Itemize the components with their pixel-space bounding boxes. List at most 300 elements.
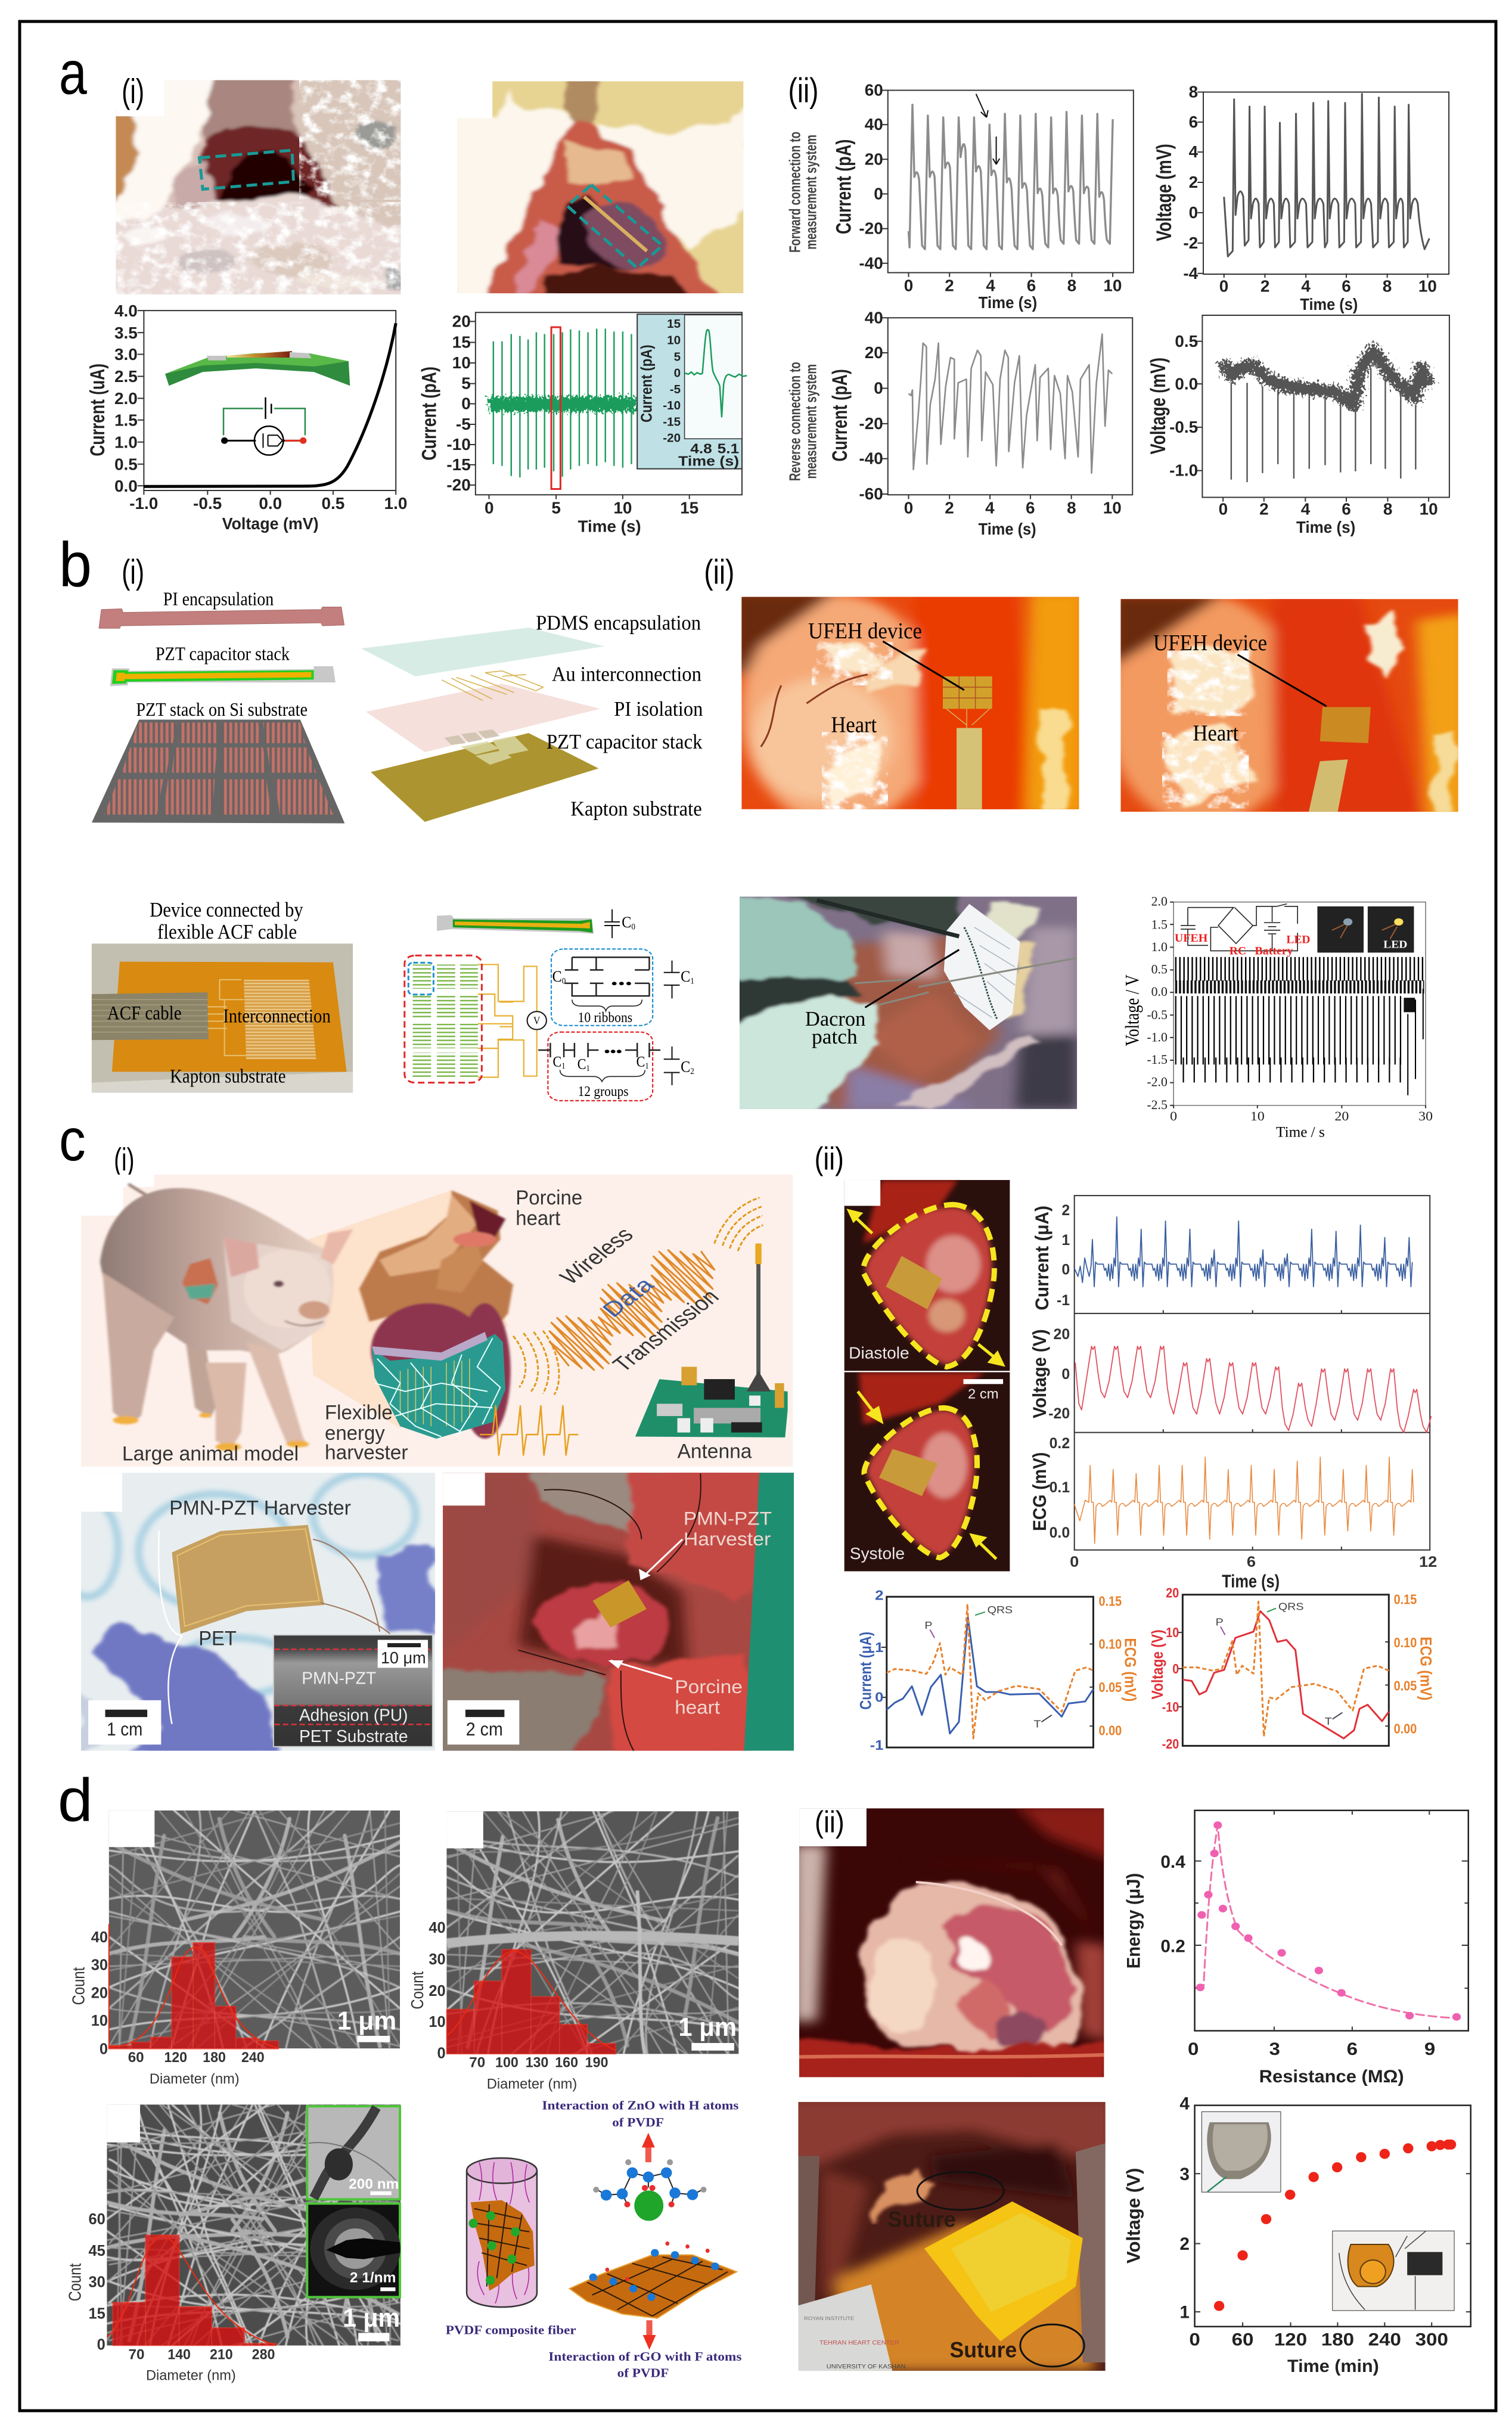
circuit schematic of device: C xyxy=(552,1053,566,1070)
panel c left xyxy=(57,1107,794,1757)
inset: zoomed pulse: 0 xyxy=(674,367,681,380)
wave labels xyxy=(122,1187,752,1465)
photo: harvester on porcine heart: PMN-PZT xyxy=(684,1508,772,1529)
chart: voltage vs ECG single beat: ECG (mV) xyxy=(1417,1637,1435,1700)
SEM image 3 with histogram and insets xyxy=(66,2101,400,2383)
photo: implanted yellow patch with sutures: UNIVERSITY OF KASHAN xyxy=(827,2364,906,2370)
chart: current, voltage, ECG time series: 0.2 xyxy=(1050,1436,1070,1452)
chart: voltage vs time with insets: 60 xyxy=(1232,2330,1253,2349)
wave labels: harvester xyxy=(325,1441,408,1464)
label (i): (i) xyxy=(122,72,144,110)
row label forward connection: measurement system xyxy=(802,135,819,250)
inset: layer cross section: 10 μm xyxy=(381,1648,426,1667)
photo: Dacron patch surgery xyxy=(731,889,1077,1115)
SEM image 2 with histogram: Count xyxy=(408,1971,427,2009)
row label forward connection: Forward connection to xyxy=(786,132,803,253)
SEM image 2 with histogram: 10 xyxy=(429,2014,446,2030)
chart: current vs ECG single beat: 0.10 xyxy=(1099,1637,1122,1652)
photo: heart in open chest xyxy=(794,1804,1113,2082)
chart: LED charging voltage: 10 xyxy=(1250,1109,1265,1123)
chart: current, voltage, ECG time series xyxy=(1029,1196,1437,1591)
device photo with ACF cable: Device connected by xyxy=(150,898,303,921)
inset: zoomed pulse: Current (pA) xyxy=(638,344,655,423)
chart: reverse current: -20 xyxy=(859,414,883,433)
photo: harvester on porcine heart: 2 cm xyxy=(466,1719,503,1740)
photo: implanted yellow patch with sutures xyxy=(789,2097,1113,2371)
chart: I-V curve with device inset: 4.0 xyxy=(114,302,138,320)
chart: LED charging voltage: -2.5 xyxy=(1147,1098,1168,1112)
chart: reverse voltage: 2 xyxy=(1259,500,1269,518)
chart: forward voltage: Time (s) xyxy=(1300,294,1358,313)
label (i): (i) xyxy=(122,552,144,591)
SEM image 2 with histogram: 30 xyxy=(429,1951,446,1968)
scale bar 1 cm: 1 cm xyxy=(107,1719,142,1740)
SEM image 2 with histogram: Diameter (nm) xyxy=(487,2076,577,2092)
chart: voltage vs time with insets: Voltage (V) xyxy=(1123,2168,1144,2263)
device photo with ACF cable xyxy=(92,898,353,1093)
photo: harvester on porcine heart: Harvester xyxy=(684,1529,771,1550)
chart: voltage vs ECG single beat: Voltage (V) xyxy=(1148,1629,1166,1699)
photo: rat chest with device (bubble wrap) xyxy=(116,80,400,294)
chart: forward current: 8 xyxy=(1067,276,1076,294)
circuit schematic of device: 1 xyxy=(561,1061,566,1070)
heading letter d: d xyxy=(58,1766,93,1834)
chart: current, voltage, ECG time series: 0 xyxy=(1070,1553,1079,1570)
inset: layer cross section xyxy=(274,1635,433,1747)
heart beat trace xyxy=(480,1406,578,1455)
chart: voltage vs ECG single beat: 0.00 xyxy=(1394,1722,1417,1737)
inset: rectifier circuit and LED photos: RC xyxy=(1230,945,1246,957)
PI encapsulation bar xyxy=(99,589,344,628)
PVDF composite fiber diagram: of PVDF xyxy=(612,2116,664,2129)
chart: reverse current: 2 xyxy=(945,499,954,517)
chart: current, voltage, ECG time series: Voltage (V) xyxy=(1029,1329,1050,1418)
SEM image 1 with histogram: 180 xyxy=(203,2049,226,2065)
label (ii): (ii) xyxy=(788,72,818,110)
chart: LED charging voltage: 2.0 xyxy=(1151,895,1168,909)
photo: systole: 2 cm xyxy=(968,1386,999,1402)
chart: reverse current xyxy=(828,308,1132,538)
red arrow down xyxy=(643,2320,656,2350)
chart: forward voltage: 6 xyxy=(1189,113,1198,131)
photo: implanted yellow patch with sutures: Suture xyxy=(950,2338,1017,2362)
row label reverse connection xyxy=(786,362,819,481)
chart: voltage vs time with insets: 0 xyxy=(1189,2330,1200,2349)
chart: forward voltage: 8 xyxy=(1189,83,1198,101)
chart: green current trace with inset: 20 xyxy=(452,312,471,330)
SEM image 3 with histogram and insets: 1 μm xyxy=(343,2303,400,2333)
icon: transistor circuit xyxy=(221,398,306,455)
PZT stack on Si substrate: PZT stack on Si substrate xyxy=(136,700,308,721)
chart: energy vs resistance: 6 xyxy=(1347,2039,1358,2058)
photo: UFEH device bent with heart: Heart xyxy=(1193,721,1238,746)
chart: voltage vs time with insets: 120 xyxy=(1274,2330,1307,2349)
panel a left column xyxy=(59,38,753,536)
inset: zoomed pulse: -10 xyxy=(663,399,681,412)
chart: energy vs resistance xyxy=(1123,1811,1468,2086)
exploded layer stack: Au interconnection xyxy=(552,662,701,685)
PVDF composite fiber diagram: Interaction of ZnO with H atoms xyxy=(542,2099,738,2113)
orange data wave xyxy=(535,1235,734,1381)
chart: forward current: 6 xyxy=(1027,276,1036,294)
SEM image 1 with histogram xyxy=(69,1811,400,2086)
chart: I-V curve with device inset: -0.5 xyxy=(193,494,222,513)
chart: green current trace with inset: Time (s) xyxy=(578,517,641,536)
SEM image 3 with histogram and insets: 45 xyxy=(89,2243,105,2259)
panel d left xyxy=(58,1766,741,2383)
wave labels: Flexible xyxy=(325,1402,393,1424)
chart: voltage vs time with insets: 300 xyxy=(1415,2330,1448,2349)
inset: layer cross section: Adhesion (PU) xyxy=(299,1705,408,1725)
circuit schematic of device: C xyxy=(578,1056,591,1072)
wave labels: Wireless xyxy=(555,1224,638,1289)
SEM image 2 with histogram: 1 μm xyxy=(678,2013,737,2042)
SEM image 3 with histogram and insets: Count xyxy=(66,2263,85,2301)
photo: UFEH device bent with heart: UFEH device xyxy=(1153,631,1267,655)
SEM image 3 with histogram and insets: 30 xyxy=(89,2274,105,2290)
SEM image 1 with histogram: 10 xyxy=(91,2013,108,2029)
chart: forward current: 60 xyxy=(865,81,883,100)
SEM image 1 with histogram: 0 xyxy=(100,2041,108,2057)
inset: battery pack xyxy=(1201,2112,1281,2192)
chart: forward voltage: -4 xyxy=(1183,264,1199,282)
exploded layer stack: PI isolation xyxy=(614,697,703,721)
chart: I-V curve with device inset: 0.0 xyxy=(114,477,138,495)
panel b right xyxy=(704,552,1467,1123)
cylinder xyxy=(467,2158,537,2307)
inset: diffraction pattern xyxy=(307,2203,400,2297)
panel b left xyxy=(59,529,703,1101)
chart: LED charging voltage: -0.5 xyxy=(1147,1008,1168,1022)
inset: zoomed pulse: Time (s) xyxy=(678,454,739,469)
chart: forward current: Current (pA) xyxy=(832,139,855,234)
photo: harvester on porcine heart: heart xyxy=(675,1697,720,1718)
photo: UFEH device on heart: Heart xyxy=(831,712,877,737)
SEM image 1 with histogram: 30 xyxy=(91,1957,108,1974)
SEM image 3 with histogram and insets: Diameter (nm) xyxy=(146,2367,236,2383)
chart: current vs ECG single beat: ECG (mV) xyxy=(1121,1638,1140,1701)
device photo with ACF cable: Interconnection xyxy=(223,1005,331,1027)
red arrow up xyxy=(642,2133,655,2162)
chart: forward voltage: Voltage (mV) xyxy=(1152,144,1176,241)
device photo with ACF cable: Kapton substrate xyxy=(170,1066,286,1087)
chart: forward current: -40 xyxy=(859,254,883,272)
chart: reverse current: 0 xyxy=(874,379,883,398)
row label reverse connection: Reverse connection to xyxy=(786,362,803,481)
chart: green current trace with inset: Current (pA) xyxy=(418,367,440,461)
chart: current, voltage, ECG time series: 20 xyxy=(1054,1327,1070,1343)
chart: I-V curve with device inset: 1.0 xyxy=(114,433,138,451)
inset: rectifier circuit and LED photos: LED xyxy=(1383,938,1407,951)
chart: forward voltage: 0 xyxy=(1219,277,1228,296)
chart: current, voltage, ECG time series: -20 xyxy=(1048,1406,1070,1422)
illustration: antenna and circuit board xyxy=(635,1244,788,1437)
chart: forward voltage: 8 xyxy=(1383,277,1392,296)
chart: reverse current: 40 xyxy=(865,308,883,327)
panel c right xyxy=(815,1124,1437,1753)
circuit schematic of device: 1 xyxy=(586,1063,590,1073)
circuit schematic of device: C xyxy=(681,967,695,985)
chart: I-V curve with device inset: 3.0 xyxy=(114,345,138,364)
SEM image 1 with histogram: 240 xyxy=(241,2049,265,2065)
chart: LED charging voltage: 30 xyxy=(1418,1109,1433,1123)
circuit schematic of device: C xyxy=(637,1053,650,1070)
chart: reverse current: Time (s) xyxy=(979,519,1036,538)
chart: forward current: 0 xyxy=(904,276,913,294)
SEM image 2 with histogram: 100 xyxy=(495,2054,519,2070)
chart: voltage vs ECG single beat: 20 xyxy=(1166,1585,1179,1601)
chart: voltage vs time with insets: 2 xyxy=(1179,2234,1190,2254)
photo: UFEH device on heart xyxy=(741,597,1079,809)
inset: rectifier circuit and LED photos xyxy=(1175,904,1414,957)
chart: forward current: 0 xyxy=(874,185,883,203)
chart: energy vs resistance: Energy (μJ) xyxy=(1123,1873,1144,1968)
SEM image 2 with histogram: 190 xyxy=(585,2054,608,2070)
chart: LED charging voltage: 0.5 xyxy=(1151,962,1168,977)
chart: forward voltage: 10 xyxy=(1418,277,1437,296)
chart: LED charging voltage: -2.0 xyxy=(1147,1075,1168,1089)
photo: UFEH device bent with heart xyxy=(1120,599,1458,812)
chart: forward voltage: 2 xyxy=(1260,277,1269,296)
chart: LED charging voltage: 0 xyxy=(1170,1109,1177,1123)
chart: reverse voltage: 0.5 xyxy=(1175,332,1198,350)
chart: current vs ECG single beat: 2 xyxy=(875,1588,883,1603)
label (ii): (ii) xyxy=(815,1805,845,1839)
device photo with ACF cable: ACF cable xyxy=(107,1003,182,1024)
SEM image 2 with histogram: 70 xyxy=(469,2054,485,2070)
inset: rectifier circuit and LED photos: Battery xyxy=(1255,945,1293,957)
chart: LED charging voltage: Voltage / V xyxy=(1122,974,1143,1046)
circuit schematic of device: ... xyxy=(604,1035,623,1058)
chart: I-V curve with device inset: 2.5 xyxy=(114,367,138,386)
chart: voltage vs time with insets: 4 xyxy=(1179,2094,1190,2114)
inset: zoomed pulse: 10 xyxy=(667,334,681,347)
photo: systole xyxy=(845,1372,1010,1572)
chart: reverse voltage: 10 xyxy=(1420,500,1438,518)
SEM image 1 with histogram: Count xyxy=(69,1967,88,2005)
SEM image 1 with histogram: 20 xyxy=(91,1985,108,2001)
chart: forward current: 10 xyxy=(1103,276,1122,294)
inset: zoomed pulse xyxy=(637,314,747,469)
PZT stack on Si substrate xyxy=(92,700,344,823)
photo: Dacron patch surgery: patch xyxy=(812,1026,858,1048)
chart: current vs ECG single beat xyxy=(856,1588,1140,1753)
chart: forward current: Time (s) xyxy=(979,293,1037,312)
photo: implanted yellow patch with sutures: Suture xyxy=(887,2207,956,2232)
chart: reverse voltage: -0.5 xyxy=(1169,418,1198,436)
chart: current, voltage, ECG time series: ECG (mV) xyxy=(1029,1452,1050,1531)
SEM image 3 with histogram and insets: 60 xyxy=(89,2211,105,2228)
inset: zoomed pulse: -5 xyxy=(670,383,681,396)
chart: current vs ECG single beat: -1 xyxy=(870,1738,883,1753)
PVDF composite fiber diagram: of PVDF xyxy=(617,2366,669,2380)
PZT capacitor stack bar xyxy=(110,644,336,686)
chart: forward current: -20 xyxy=(859,219,883,238)
circuit schematic of device: 1 xyxy=(645,1061,649,1070)
chart: I-V curve with device inset: Current (uA) xyxy=(87,364,109,457)
PI encapsulation bar: PI encapsulation xyxy=(163,589,274,610)
circuit schematic of device: 0 xyxy=(631,922,635,932)
chart: green current trace with inset: 5 xyxy=(551,499,561,517)
chart: reverse current: 10 xyxy=(1103,499,1122,517)
wave labels: Antenna xyxy=(678,1440,752,1463)
SEM image 3 with histogram and insets: 140 xyxy=(167,2346,191,2362)
chart: green current trace with inset xyxy=(418,312,747,536)
chart: energy vs resistance: 9 xyxy=(1424,2039,1435,2058)
photo: systole: Systole xyxy=(850,1545,905,1563)
circuit schematic of device: 0 xyxy=(562,976,566,986)
circuit schematic of device: 10 ribbons xyxy=(578,1010,632,1026)
circuit schematic of device: C xyxy=(552,967,566,985)
chart: current, voltage, ECG time series: 0.0 xyxy=(1050,1525,1070,1541)
SEM image 2 with histogram: 160 xyxy=(555,2054,578,2070)
PZT capacitor stack bar: PZT capacitor stack xyxy=(156,644,290,665)
chart: voltage vs time with insets: 3 xyxy=(1179,2165,1190,2184)
chart: current vs ECG single beat: 0.05 xyxy=(1099,1680,1122,1696)
photo: PMN-PZT harvester on PET: PMN-PZT Harvester xyxy=(169,1496,351,1519)
inset: device with circuit board xyxy=(1333,2231,1454,2311)
chart: I-V curve with device inset: 0.5 xyxy=(321,494,344,513)
inset: zoomed pulse: -15 xyxy=(663,415,681,429)
SEM image 2 with histogram xyxy=(408,1809,738,2092)
beam from pig to heart xyxy=(308,1190,508,1429)
PVDF composite fiber diagram xyxy=(446,2099,741,2380)
chart: forward current xyxy=(832,81,1134,312)
exploded layer stack: PDMS encapsulation xyxy=(536,611,701,634)
chart: green current trace with inset: 10 xyxy=(613,499,632,517)
rGO sheet with atoms xyxy=(570,2241,737,2318)
SEM image 1 with histogram: 40 xyxy=(91,1929,108,1946)
photo: diastole xyxy=(845,1180,1010,1371)
chart: energy vs resistance: 0 xyxy=(1188,2039,1199,2058)
chart: reverse current: 0 xyxy=(904,499,913,517)
illustration: pig xyxy=(100,1184,353,1451)
chart: current vs ECG single beat: QRS xyxy=(988,1604,1013,1616)
SEM image 3 with histogram and insets: 280 xyxy=(252,2346,275,2362)
chart: LED charging voltage: 20 xyxy=(1334,1109,1349,1123)
chart: I-V curve with device inset: 0.5 xyxy=(114,455,138,473)
label (i): (i) xyxy=(114,1141,135,1178)
chart: voltage vs ECG single beat: 0.05 xyxy=(1394,1678,1417,1694)
circuit schematic of device: 1 xyxy=(690,976,694,986)
chart: I-V curve with device inset: 3.5 xyxy=(114,324,138,342)
chart: LED charging voltage: 1.5 xyxy=(1151,917,1168,932)
inset: rectifier circuit and LED photos: UFEH xyxy=(1175,932,1208,945)
chart: green current trace with inset: 5 xyxy=(461,374,471,393)
wave labels: Large animal model xyxy=(122,1442,299,1465)
inset: zoomed pulse: 4.8 xyxy=(690,440,712,457)
chart: green current trace with inset: 0 xyxy=(485,499,494,517)
chart: I-V curve with device inset: Voltage (mV) xyxy=(222,514,319,533)
chart: I-V curve with device inset: 1.0 xyxy=(384,494,407,513)
label (ii): (ii) xyxy=(815,1141,844,1176)
chart: forward current: 4 xyxy=(986,276,995,294)
row label forward connection xyxy=(786,132,819,253)
chart: reverse current: 20 xyxy=(865,343,883,362)
chart: green current trace with inset: -10 xyxy=(446,435,471,454)
photo: diastole: Diastole xyxy=(849,1345,909,1362)
illustration: heart with harvester xyxy=(359,1190,513,1439)
SEM image 1 with histogram: 120 xyxy=(164,2049,187,2065)
chart: current, voltage, ECG time series: 0 xyxy=(1061,1367,1070,1383)
chart: I-V curve with device inset xyxy=(87,302,407,533)
photo: harvester on porcine heart: Porcine xyxy=(675,1676,743,1697)
chart: LED charging voltage: -1.0 xyxy=(1147,1030,1168,1044)
wave labels: Porcine xyxy=(516,1187,582,1209)
chart: voltage vs ECG single beat: P xyxy=(1216,1616,1224,1628)
panel a(ii) charts xyxy=(786,72,1449,538)
chart: voltage vs ECG single beat: QRS xyxy=(1278,1600,1303,1612)
chart: voltage vs time with insets: 240 xyxy=(1368,2330,1401,2349)
photo: Dacron patch surgery: Dacron xyxy=(805,1008,865,1030)
wireless wave arcs xyxy=(513,1198,763,1395)
chart: LED charging voltage: 0.0 xyxy=(1151,985,1168,999)
chart: current vs ECG single beat: 0.15 xyxy=(1099,1594,1122,1609)
chart: energy vs resistance: 0.2 xyxy=(1160,1936,1185,1956)
circuit schematic of device: 2 xyxy=(690,1066,694,1076)
chart: reverse voltage: Voltage (mV) xyxy=(1147,358,1170,454)
chart: forward voltage xyxy=(1152,83,1449,313)
chart: reverse current: 8 xyxy=(1067,499,1076,517)
SEM image 2 with histogram: 20 xyxy=(429,1983,446,1999)
SEM image 2 with histogram: 130 xyxy=(526,2054,548,2070)
photo: implanted yellow patch with sutures: ROYAN INSTITUTE xyxy=(804,2316,854,2321)
chart: forward voltage: 2 xyxy=(1189,173,1198,191)
photo: implanted yellow patch with sutures: TEHRAN HEART CENTER xyxy=(819,2340,899,2346)
inset: rectifier circuit and LED photos: LED xyxy=(1286,933,1311,946)
chart: current, voltage, ECG time series: 0 xyxy=(1061,1262,1070,1278)
chart: reverse current: 6 xyxy=(1026,499,1035,517)
chart: green current trace with inset: 15 xyxy=(452,333,471,352)
circuit schematic of device xyxy=(405,909,694,1101)
chart: voltage vs time with insets: Time (min) xyxy=(1287,2356,1379,2376)
chart: reverse voltage: -1.0 xyxy=(1169,461,1198,480)
circuit schematic of device: ... xyxy=(611,967,632,990)
inset: zoomed pulse: 15 xyxy=(667,317,681,331)
chart: current, voltage, ECG time series: 6 xyxy=(1247,1553,1256,1570)
chart: LED charging voltage: 1.0 xyxy=(1151,940,1168,954)
photo: PMN-PZT harvester on PET: PET xyxy=(198,1627,237,1650)
chart: I-V curve with device inset: 1.5 xyxy=(114,411,138,429)
chart: current vs ECG single beat: 0 xyxy=(875,1690,883,1705)
circuit schematic of device: C xyxy=(681,1058,695,1075)
chart: green current trace with inset: 10 xyxy=(452,353,471,372)
chart: current, voltage, ECG time series: Current (μA) xyxy=(1032,1206,1052,1311)
label (i): (i) xyxy=(113,1806,135,1840)
inset: layer cross section: PET Substrate xyxy=(299,1727,408,1746)
chart: voltage vs time with insets: 1 xyxy=(1179,2303,1190,2322)
inset: TEM image: 200 nm xyxy=(349,2176,399,2192)
chart: energy vs resistance: Resistance (MΩ) xyxy=(1259,2066,1404,2086)
heading letter a: a xyxy=(59,38,87,107)
chart: current, voltage, ECG time series: 12 xyxy=(1419,1553,1437,1570)
scale bar 1 cm xyxy=(88,1700,161,1744)
chart: energy vs resistance: 0.4 xyxy=(1160,1852,1185,1872)
chart: voltage vs ECG single beat: -10 xyxy=(1162,1699,1179,1715)
chart: I-V curve with device inset: -1.0 xyxy=(129,494,158,513)
SEM image 2 with histogram: 40 xyxy=(429,1920,446,1936)
SEM image 2 with histogram: 0 xyxy=(437,2045,446,2061)
chart: reverse voltage: 0.0 xyxy=(1175,374,1198,393)
chart: current vs ECG single beat: T xyxy=(1034,1718,1041,1730)
chart: current, voltage, ECG time series: -1 xyxy=(1057,1293,1070,1309)
PVDF composite fiber diagram: Interaction of rGO with F atoms xyxy=(548,2350,741,2364)
wave labels: heart xyxy=(516,1207,560,1230)
heading letter b: b xyxy=(59,529,92,600)
chart: voltage vs ECG single beat: 0.10 xyxy=(1394,1635,1417,1651)
chart: reverse voltage: 8 xyxy=(1383,500,1392,518)
inset: zoomed pulse: 5.1 xyxy=(718,440,739,457)
